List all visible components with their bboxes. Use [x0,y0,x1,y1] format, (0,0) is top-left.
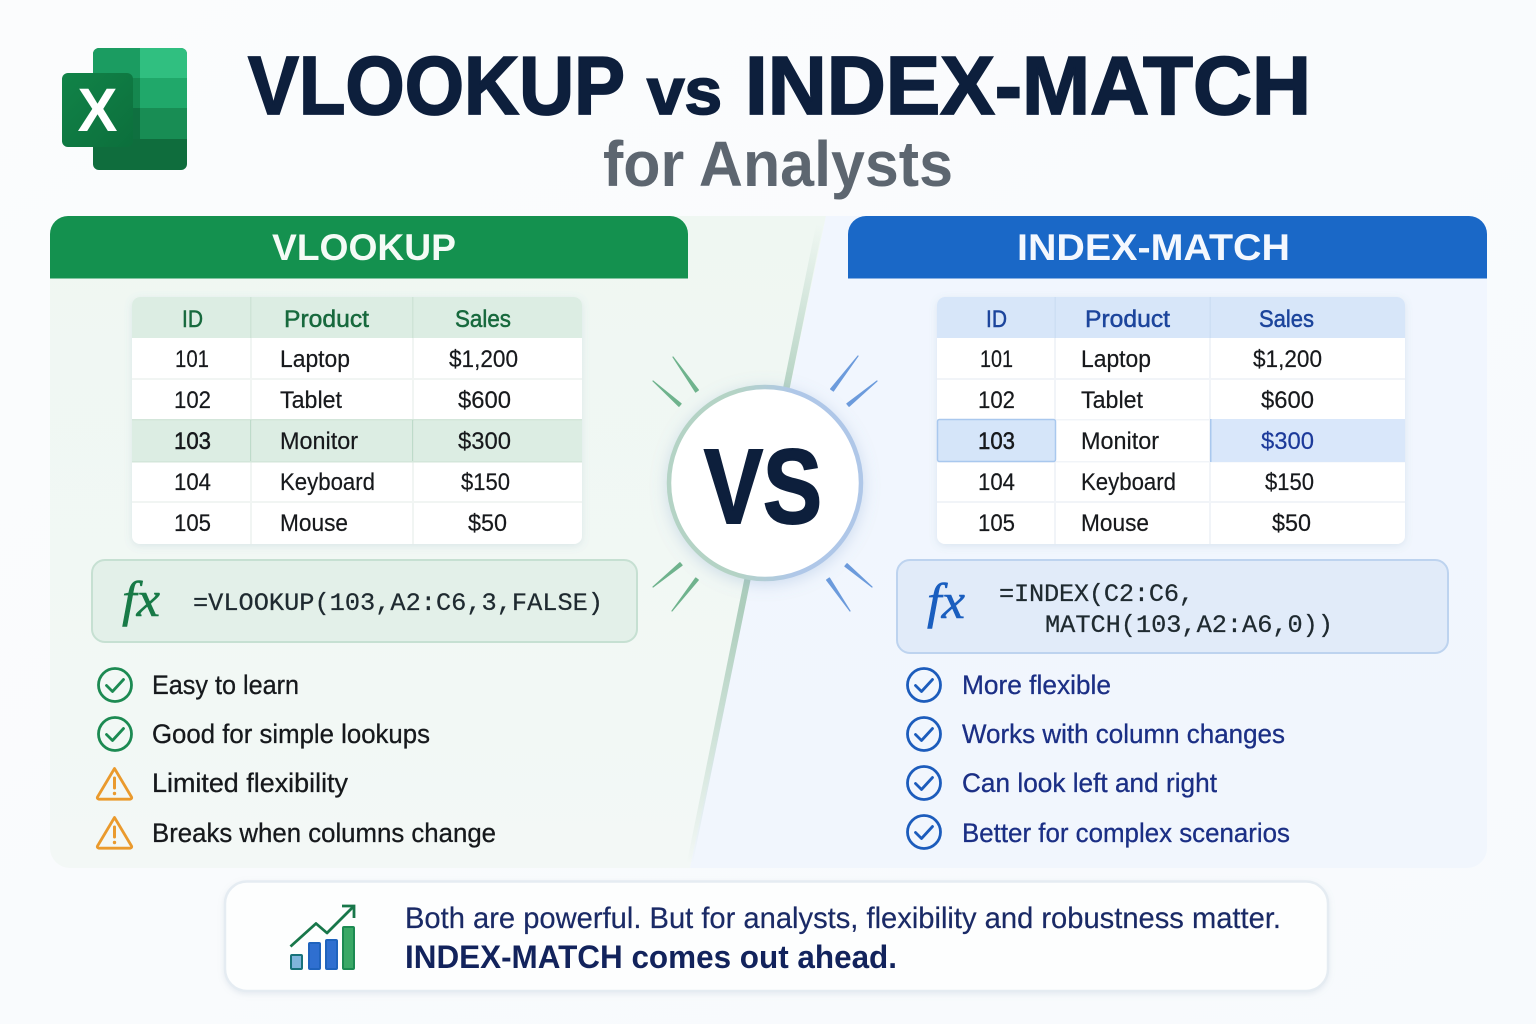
title: vs [647,54,722,128]
panel: INDEX-MATCH [848,216,1487,848]
table: VLOOKUP data: 103 [174,428,211,455]
formula: INDEX-MATCH: =INDEX(C2:C6, [999,580,1194,609]
table: INDEX-MATCH data: $300 [1261,428,1314,455]
callout: conclusion: Both are powerful. But for analysts, flexibility and robustness matter. [405,902,1281,935]
benefit: more flexible: More flexible [962,670,1111,700]
table: INDEX-MATCH data: Monitor [1081,428,1159,455]
table: INDEX-MATCH data: $1,200 [1253,346,1322,373]
pro: easy to learn [98,668,299,702]
table: VLOOKUP data: ID [182,306,203,333]
table: VLOOKUP data: Product [284,306,369,333]
benefit: complex scenarios: Better for complex scenarios [962,818,1290,848]
table: INDEX-MATCH data: Laptop [1081,346,1151,373]
callout: conclusion: INDEX-MATCH comes out ahead. [405,939,897,975]
heading: VLOOKUP [50,216,688,278]
table: VLOOKUP data: 104 [174,469,211,496]
pro: easy to learn: Easy to learn [152,670,299,700]
list: INDEX-MATCH benefits [908,668,1290,848]
heading: INDEX-MATCH: INDEX-MATCH [1017,227,1290,268]
table: VLOOKUP data: Keyboard [280,469,375,496]
formula: INDEX-MATCH: MATCH(103,A2:A6,0)) [1045,611,1333,640]
table: VLOOKUP data: Sales [455,306,511,333]
formula: INDEX-MATCH: fx [927,573,965,629]
icon: Excel logo [62,48,187,170]
subtitle: for Analysts [603,128,953,200]
divider line [687,225,823,862]
table: VLOOKUP data: $1,200 [449,346,518,373]
title: VLOOKUP [248,39,625,132]
formula: VLOOKUP: =VLOOKUP(103,A2:C6,3,FALSE) [193,589,603,618]
table: INDEX-MATCH data: Tablet [1081,387,1143,414]
VS badge [653,356,877,611]
table: VLOOKUP data: 101 [175,346,209,373]
panel backgrounds [50,216,1104,704]
con: limited flexibility: Limited flexibility [152,768,348,798]
table: VLOOKUP data: Laptop [280,346,350,373]
VS badge: VS [704,428,822,546]
icon: Excel logo: X [78,76,118,144]
benefit: left and right: Can look left and right [962,768,1217,798]
table: INDEX-MATCH data: Mouse [1081,510,1149,537]
title: INDEX-MATCH [745,39,1311,132]
table: VLOOKUP data: Mouse [280,510,348,537]
table: VLOOKUP data: Monitor [280,428,358,455]
green rays [653,357,698,611]
table: INDEX-MATCH data: $150 [1265,469,1314,496]
benefit: column changes: Works with column changes [962,719,1285,749]
blue rays [827,356,877,611]
panel: VLOOKUP [50,216,688,848]
table: INDEX-MATCH data: $50 [1272,510,1311,537]
callout: conclusion [225,882,1328,991]
table: VLOOKUP data: $300 [458,428,511,455]
table: VLOOKUP data: $600 [458,387,511,414]
icon: growth chart [290,906,354,969]
table: INDEX-MATCH data: Sales [1259,306,1314,333]
pro: simple lookups: Good for simple lookups [152,719,430,749]
heading: VLOOKUP: VLOOKUP [272,227,456,268]
table: INDEX-MATCH data: 104 [978,469,1015,496]
table: INDEX-MATCH data: ID [986,306,1007,333]
heading: INDEX-MATCH [848,216,1487,278]
title [248,39,1311,132]
table: VLOOKUP data [132,297,582,544]
table: INDEX-MATCH data [937,297,1405,544]
table: INDEX-MATCH data: 101 [980,346,1013,373]
table: INDEX-MATCH data: Keyboard [1081,469,1176,496]
table: VLOOKUP data: Tablet [280,387,342,414]
table: VLOOKUP data: 102 [174,387,211,414]
table: INDEX-MATCH data: 105 [978,510,1015,537]
table: INDEX-MATCH data: Product [1085,306,1170,333]
list: VLOOKUP pros and cons [97,668,496,848]
table: INDEX-MATCH data: $600 [1261,387,1314,414]
formula: VLOOKUP: fx [122,571,160,627]
formula: VLOOKUP [92,560,637,642]
table: VLOOKUP data: $50 [468,510,507,537]
table: VLOOKUP data: $150 [461,469,510,496]
table: VLOOKUP data: 105 [174,510,211,537]
con: breaks when columns change: Breaks when columns change [152,818,496,848]
formula: INDEX-MATCH [897,560,1448,653]
table: INDEX-MATCH data: 102 [978,387,1015,414]
table: INDEX-MATCH data: 103 [978,428,1015,455]
benefit: more flexible [908,668,1111,702]
